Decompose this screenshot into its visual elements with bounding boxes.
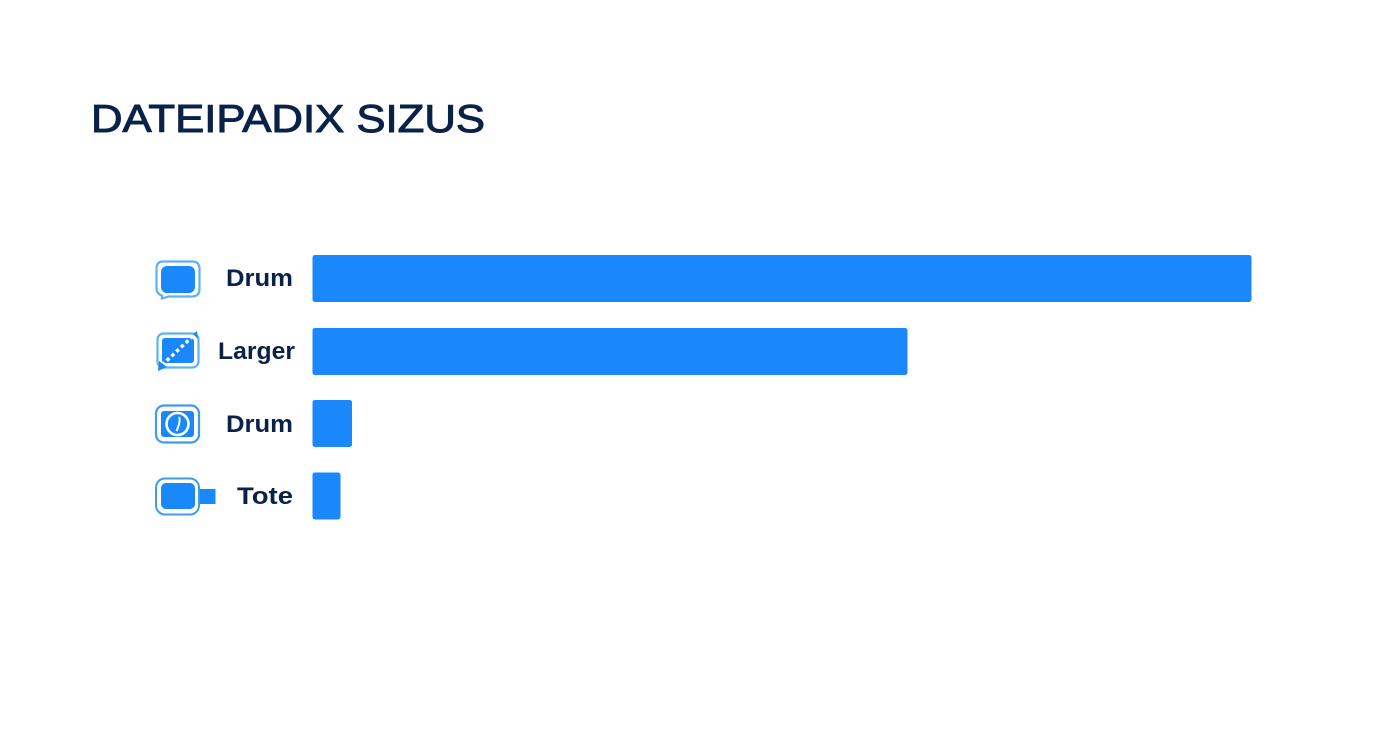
bar chart bbox=[156, 255, 1252, 520]
bar bbox=[312, 400, 352, 447]
icon: tote bbox=[156, 478, 216, 514]
row 4: Tote bbox=[156, 472, 340, 520]
icon: resize diagonal bbox=[158, 331, 198, 371]
label: Tote bbox=[237, 483, 293, 510]
row 1: Drum bbox=[156, 255, 1252, 302]
bar bbox=[312, 255, 1252, 302]
label: Drum bbox=[226, 411, 293, 438]
row 2: Larger bbox=[158, 328, 908, 375]
row 3: Drum bbox=[156, 400, 352, 447]
icon: dial bbox=[156, 406, 199, 442]
label: Drum bbox=[226, 265, 293, 292]
bar bbox=[312, 328, 908, 375]
icon: speech bubble bbox=[156, 262, 200, 298]
bar bbox=[312, 472, 340, 520]
title: DATEIPADIX SIZUS bbox=[91, 98, 485, 141]
label: Larger bbox=[218, 338, 295, 365]
